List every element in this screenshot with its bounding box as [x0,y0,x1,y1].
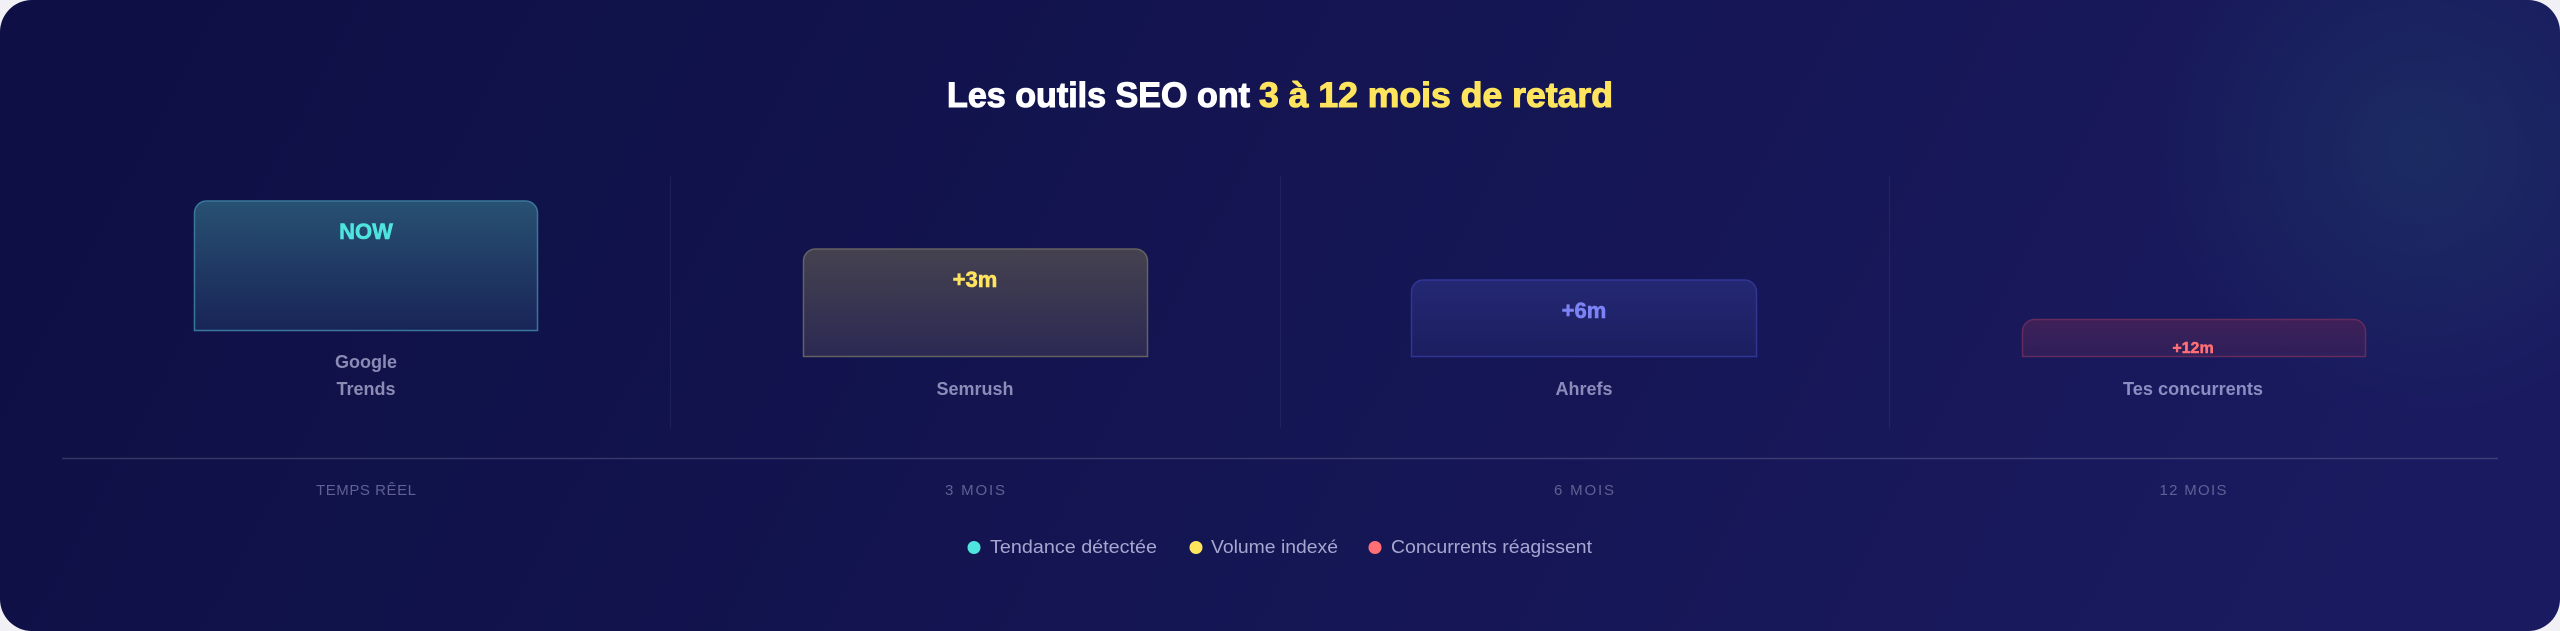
label: Semrush: Semrush [936,379,1014,399]
label: Ahrefs: Ahrefs [1555,379,1613,399]
column: Semrush [804,249,1148,399]
column dividers [670,176,1890,428]
value: +6m: +6m [1562,298,1606,323]
timeline labels: 6 MOIS [1554,482,1614,499]
title: Les outils SEO ont [947,76,1250,115]
timeline labels: 3 MOIS [945,482,1005,499]
title: 3 à 12 mois de retard [1259,76,1613,115]
bar: Tes concurrents [2022,320,2366,356]
bar: Semrush [804,249,1148,356]
timeline labels: TEMPS RÊEL [316,482,416,499]
label: Tes concurrents: Tes concurrents [2123,379,2263,399]
bar: Ahrefs [1412,280,1756,356]
legend [968,537,1592,557]
label: Google Trends: Trends [336,379,396,399]
timeline axis [62,458,2498,460]
title [947,76,1613,115]
column: Tes concurrents [2022,320,2366,399]
column: Ahrefs [1412,280,1756,399]
value: +12m: +12m [2172,340,2214,357]
timeline labels: 12 MOIS [2160,482,2226,499]
column: Google Trends [194,201,538,399]
label: Google Trends: Google [335,352,397,372]
bar: Google Trends [194,201,538,330]
legend item: Volume indexé: Volume indexé [1211,537,1338,557]
timeline labels [316,482,2226,499]
value: NOW: NOW [339,219,393,244]
value: +3m: +3m [953,267,997,292]
legend item: Tendance détectée: Tendance détectée [990,537,1157,557]
legend item: Concurrents réagissent: Concurrents réagissent [1391,537,1592,557]
